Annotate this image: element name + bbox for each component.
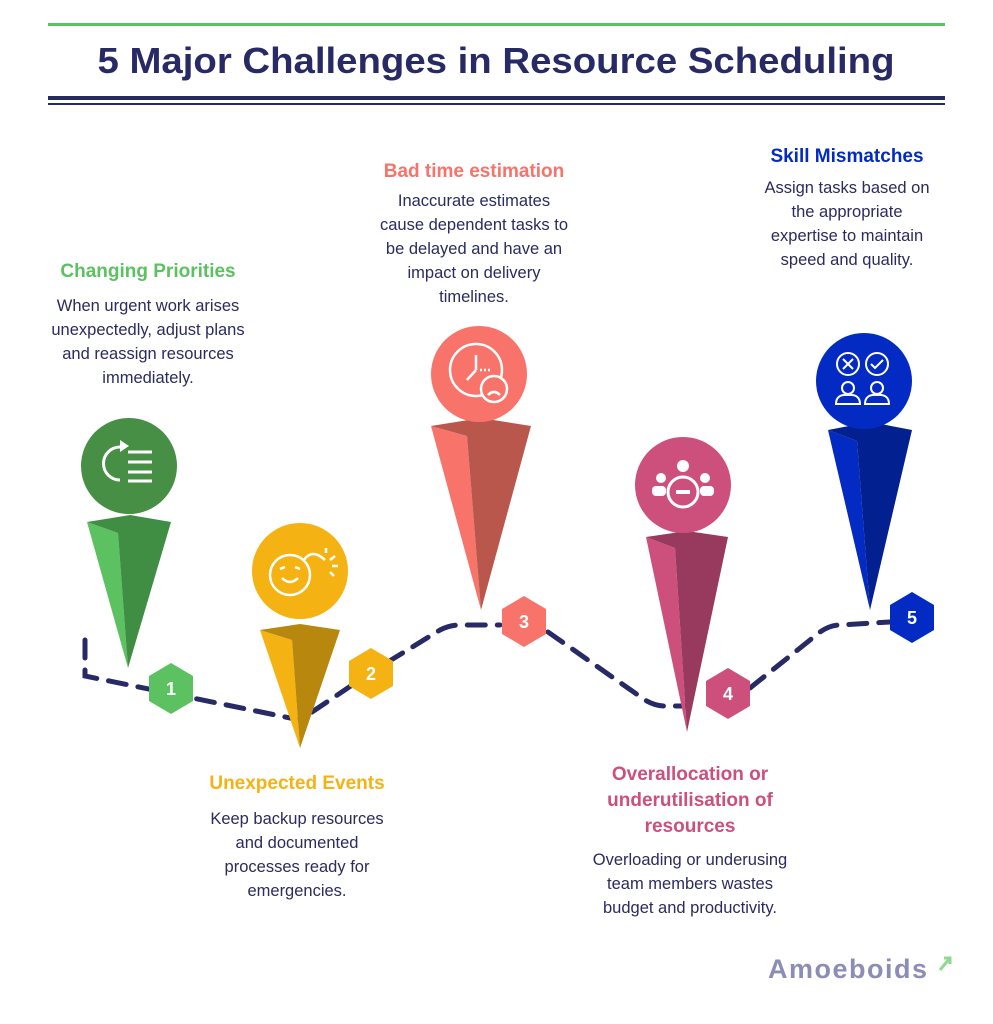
text: overallocation: budget and productivity. (603, 899, 777, 917)
pin 3: bad time estimation (431, 326, 531, 610)
text: bad time estimation (380, 161, 568, 306)
hexagon 3 (502, 596, 546, 647)
text: changing priorities: immediately. (102, 369, 194, 387)
pin 4: overallocation (635, 437, 731, 732)
text: unexpected events: Unexpected Events (209, 773, 385, 794)
text: overallocation (593, 764, 787, 917)
text: unexpected events: emergencies. (247, 882, 347, 900)
text: changing priorities: and reassign resources (62, 345, 234, 363)
text: bad time estimation: be delayed and have an (386, 240, 562, 258)
hexagon 1 (149, 663, 193, 714)
text: bad time estimation: impact on delivery (408, 264, 541, 282)
text: changing priorities: unexpectedly, adjust plans (51, 321, 245, 339)
text: bad time estimation: Inaccurate estimates (398, 192, 550, 210)
text: overallocation: Overallocation or (612, 764, 769, 785)
pin 1: changing priorities (81, 418, 177, 668)
text: skill mismatches: Skill Mismatches (770, 146, 924, 167)
text: skill mismatches: speed and quality. (781, 251, 913, 269)
title: 5 Major Challenges in Resource Scheduling (98, 40, 894, 81)
hexagon 5 (890, 592, 934, 643)
icon: cycle list (104, 440, 152, 481)
text: skill mismatches: expertise to maintain (771, 227, 923, 245)
text: changing priorities: When urgent work arises (57, 297, 239, 315)
text: overallocation: team members wastes (607, 875, 773, 893)
icon: bomb face (270, 548, 338, 595)
text: skill mismatches (764, 146, 930, 269)
text: unexpected events: and documented (236, 834, 358, 852)
hexagon 4 (706, 668, 750, 719)
text: skill mismatches: the appropriate (792, 203, 902, 221)
text: changing priorities (51, 261, 245, 387)
text: overallocation: resources (645, 816, 735, 837)
icon: team minus (652, 460, 714, 507)
pin 2: unexpected events (252, 523, 348, 748)
text: unexpected events: processes ready for (225, 858, 370, 876)
text: unexpected events (209, 773, 385, 900)
text: changing priorities: Changing Priorities (60, 261, 236, 282)
icon: people check cross (836, 353, 889, 404)
pin 5: skill mismatches (816, 333, 912, 610)
logo: Amoeboids (768, 954, 929, 984)
hexagon 2 (349, 648, 393, 699)
hexagon 5: 5 (907, 608, 917, 628)
hexagon 2: 2 (366, 664, 376, 684)
dashed path (85, 622, 890, 720)
icon: clock sad face (450, 344, 507, 402)
hexagon 4: 4 (723, 684, 733, 704)
text: overallocation: underutilisation of (607, 790, 774, 811)
text: overallocation: Overloading or underusing (593, 851, 787, 869)
text: unexpected events: Keep backup resources (210, 810, 384, 828)
text: bad time estimation: cause dependent tasks to (380, 216, 568, 234)
hexagon 1: 1 (166, 679, 176, 699)
text: bad time estimation: Bad time estimation (384, 161, 564, 182)
hexagon 3: 3 (519, 612, 529, 632)
text: bad time estimation: timelines. (439, 288, 509, 306)
text: skill mismatches: Assign tasks based on (764, 179, 930, 197)
